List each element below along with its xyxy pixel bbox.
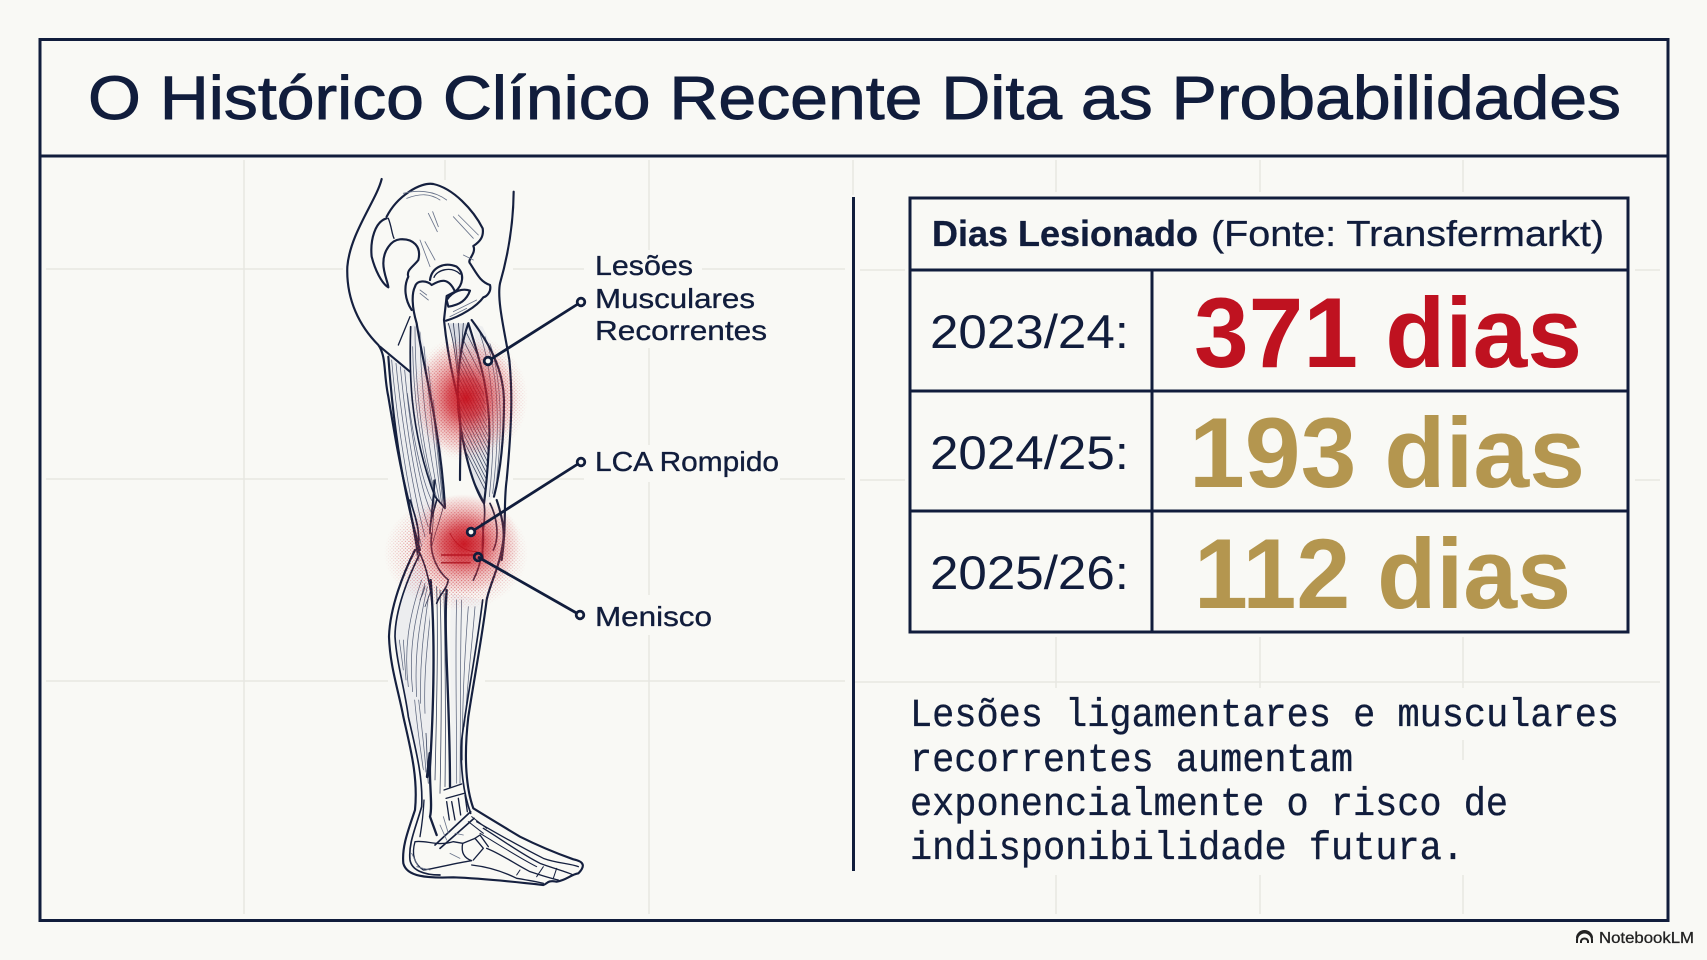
leader line: ACL [467, 458, 585, 536]
callout: muscle injuries [484, 250, 767, 365]
label: ACL: LCA Rompido [595, 446, 779, 477]
header divider [40, 154, 1668, 158]
value: 371 dias: 371 dias [1194, 277, 1582, 388]
callout: ACL [467, 446, 779, 536]
season label: 2023/24: [930, 305, 1129, 358]
label: meniscus: Menisco [595, 601, 712, 632]
wordmark: NotebookLM [1599, 930, 1694, 947]
callout: meniscus [474, 553, 712, 632]
red glow: thigh injury [410, 337, 526, 460]
row: 2024/25 [930, 397, 1585, 508]
upper leg and pelvis linework [347, 179, 514, 560]
knee linework [410, 500, 497, 603]
row: 2023/24 [930, 277, 1582, 388]
value: 112 dias: 112 dias [1194, 518, 1571, 629]
table heading: (Fonte: Transfermarkt) [1211, 213, 1604, 254]
NotebookLM watermark [1577, 930, 1694, 947]
leader line: muscle [484, 298, 585, 365]
conclusion text: Lesões ligamentares e musculares [910, 694, 1619, 739]
panel: injury days table [910, 198, 1628, 632]
table heading: Dias Lesionado [932, 213, 1198, 254]
row: 2025/26 [930, 518, 1571, 629]
panel: leg anatomy illustration [347, 179, 583, 885]
title: O Histórico Clínico Recente Dita as Probabilidades [88, 64, 1621, 132]
vertical divider [852, 197, 855, 871]
lower leg and foot linework [389, 500, 583, 885]
leader line: meniscus [474, 553, 584, 619]
conclusion text: indisponibilidade futura. [910, 827, 1464, 872]
label: muscle: Recorrentes [595, 315, 767, 346]
table grid [910, 198, 1628, 632]
red glow: knee injury [386, 496, 526, 610]
conclusion text: exponencialmente o risco de [910, 783, 1508, 828]
icon: NotebookLM arcs [1577, 931, 1592, 943]
season label: 2024/25: [930, 426, 1129, 479]
conclusion text: recorrentes aumentam [910, 739, 1353, 784]
background grid [46, 160, 1660, 914]
label: muscle: Lesões [595, 250, 693, 281]
season label: 2025/26: [930, 546, 1129, 599]
value: 193 dias: 193 dias [1189, 397, 1585, 508]
label: muscle: Musculares [595, 283, 755, 314]
